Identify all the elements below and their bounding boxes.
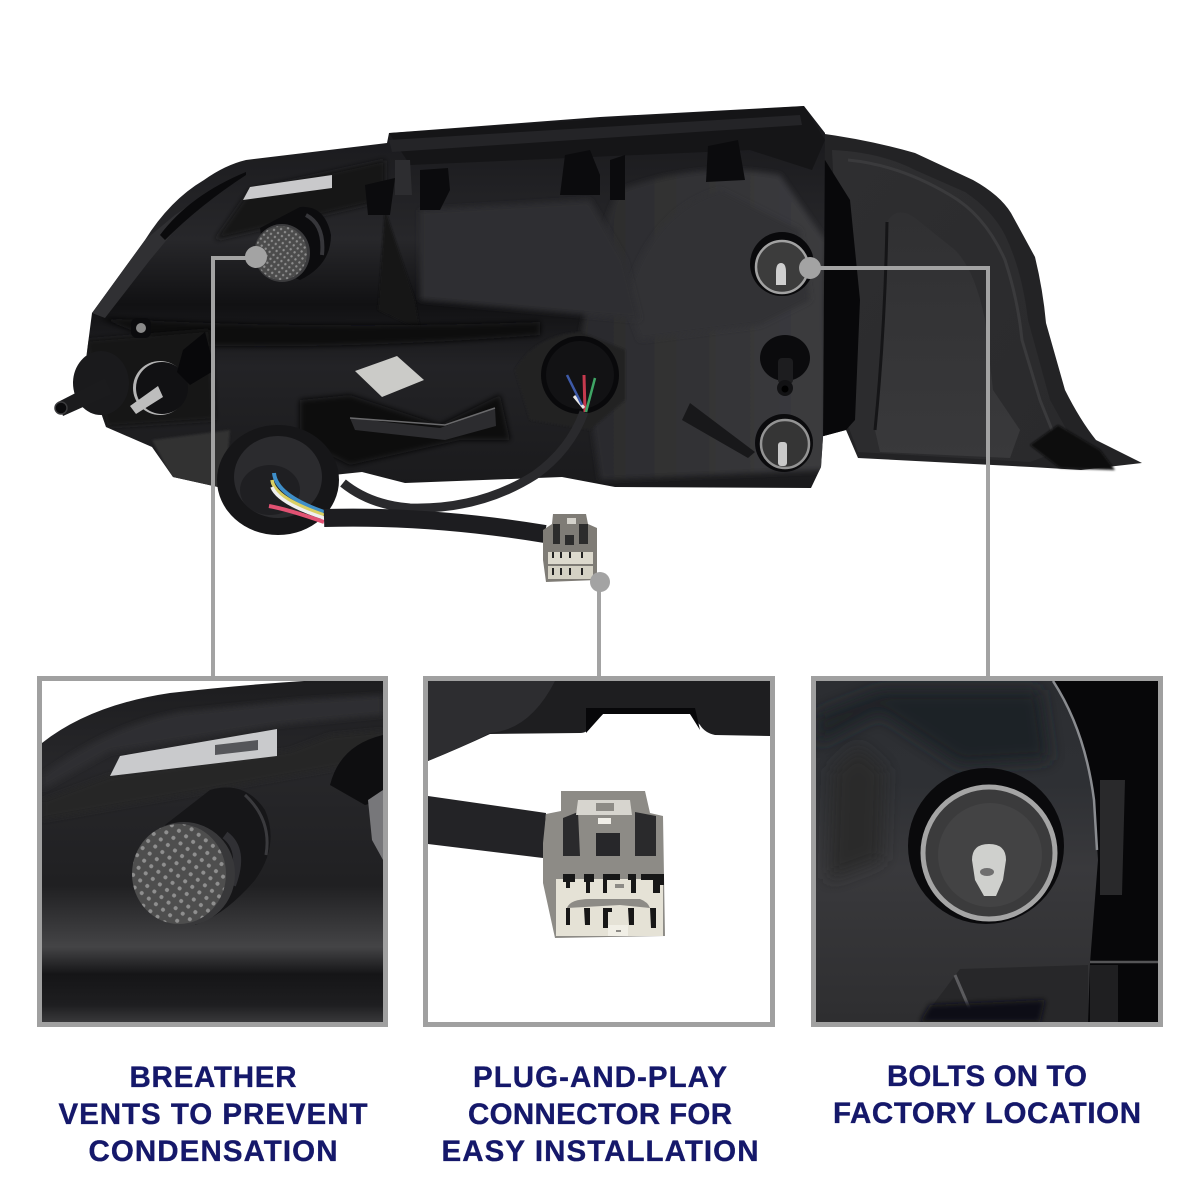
serial label [110, 729, 277, 776]
top mounting tabs [365, 140, 745, 215]
white label [243, 175, 332, 200]
vent cylinder [132, 788, 271, 926]
shaded housing surfaces [85, 106, 825, 490]
headlight assembly photo [55, 106, 1142, 582]
clear lens side [818, 133, 1142, 470]
FORM logo plate [682, 403, 755, 458]
black gap between housing and lens [806, 160, 860, 437]
cable [428, 796, 546, 858]
caption: breather vents: CONDENSATION [88, 1135, 338, 1168]
caption: breather vents [58, 1061, 368, 1168]
caption: plug-and-play: CONNECTOR FOR [468, 1098, 732, 1131]
panel: bolt close-up [814, 678, 1160, 1024]
panel: connector close-up [426, 678, 772, 1024]
caption: bolts on: BOLTS ON TO [887, 1060, 1087, 1093]
left tube grommet [55, 351, 129, 416]
large connector [543, 791, 665, 938]
callout line: bolt [799, 257, 988, 676]
diamond sticker [355, 356, 424, 397]
panel: breather vent close-up [40, 678, 386, 1024]
small connector [543, 514, 597, 582]
caption: plug-and-play: EASY INSTALLATION [442, 1135, 758, 1168]
small bolt [131, 318, 151, 338]
main rear housing [85, 106, 825, 488]
callout line: connector [590, 572, 610, 676]
caption: plug-and-play [442, 1061, 758, 1168]
grommet mid right [760, 335, 810, 396]
caption: breather vents: VENTS TO PREVENT [58, 1098, 368, 1131]
caption: bolts on: FACTORY LOCATION [833, 1097, 1141, 1130]
breather vent cap [254, 207, 331, 282]
lower grommet [217, 425, 339, 535]
bolt stud [908, 768, 1064, 924]
right bottom bolt [755, 414, 813, 472]
caption: breather vents: BREATHER [130, 1061, 296, 1094]
center grommet with wires [515, 332, 625, 430]
loop cable [343, 412, 584, 508]
callout line: breather [213, 246, 267, 676]
main cable [324, 518, 545, 534]
left stud grommet [130, 361, 188, 415]
right bracket [330, 735, 383, 805]
caption: plug-and-play: PLUG-AND-PLAY [473, 1061, 727, 1094]
right top bolt [750, 232, 814, 296]
caption: bolts on [833, 1060, 1141, 1130]
